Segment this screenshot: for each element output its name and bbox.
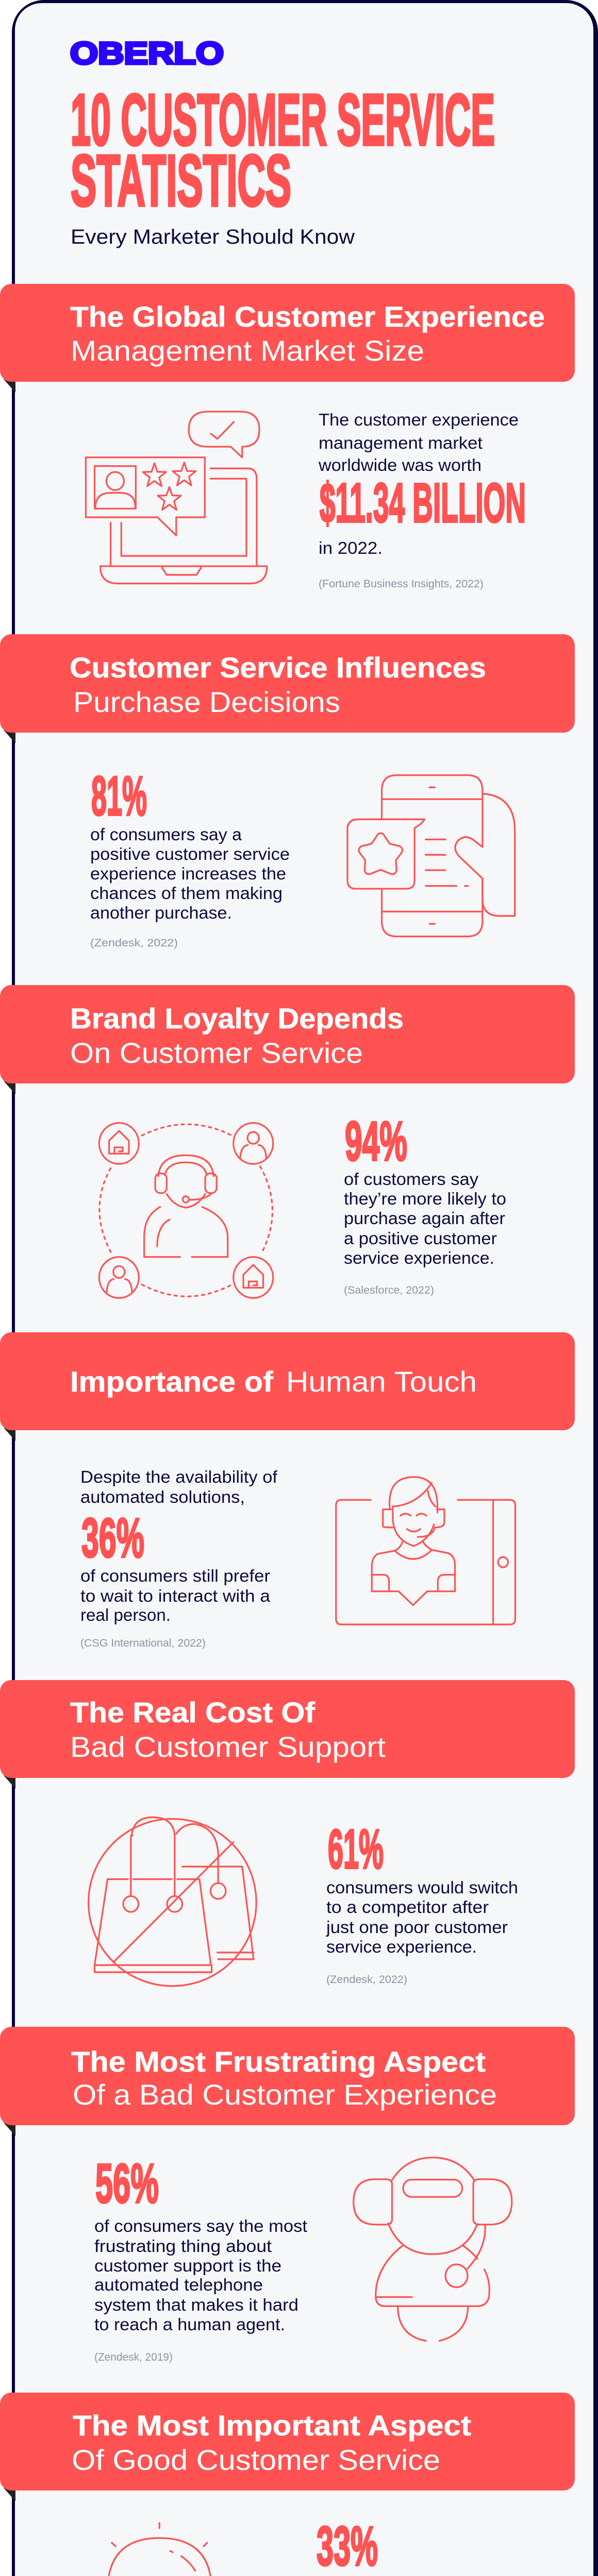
stat number: 33%: [317, 2515, 378, 2576]
source: (Fortune Business Insights, 2022): [319, 578, 484, 590]
stat text: service experience.: [344, 1248, 494, 1267]
stat number: 94%: [345, 1110, 407, 1172]
section header: Brand Loyalty Depends: [70, 1002, 404, 1035]
section header: [0, 2393, 575, 2501]
source: (CSG International, 2022): [80, 1637, 206, 1649]
stat text: real person.: [80, 1605, 171, 1624]
title: STATISTICS: [71, 140, 291, 221]
source: (Zendesk, 2019): [94, 2351, 173, 2363]
panel: most important aspect: [0, 2393, 575, 2576]
icon: robot with headset: [354, 2158, 512, 2341]
icon: laptop with review: [86, 412, 267, 584]
stat text: [80, 1467, 278, 1624]
stat text: purchase again after: [344, 1209, 505, 1228]
stat text: to a competitor after: [326, 1897, 489, 1917]
panel: brand loyalty: [0, 985, 575, 1298]
icon: agent on tablet: [336, 1477, 515, 1624]
section header: The Global Customer Experience: [70, 300, 545, 333]
section header: Of Good Customer Service: [72, 2444, 440, 2476]
source: (Salesforce, 2022): [344, 1284, 434, 1296]
icon: crossed out shopping bags: [89, 1817, 256, 1986]
title: [71, 79, 495, 221]
stat text: they’re more likely to: [344, 1189, 506, 1208]
panel: purchase decisions: [0, 634, 575, 949]
section header: [0, 1680, 575, 1789]
section header: Bad Customer Support: [70, 1731, 386, 1763]
stat text: [94, 2216, 307, 2334]
stat text: The customer experience: [319, 410, 519, 429]
panel: human touch: [0, 1332, 575, 1649]
source: (Zendesk, 2022): [90, 937, 178, 949]
stat text: of consumers say the most: [94, 2216, 307, 2235]
stat text: service experience.: [326, 1937, 477, 1956]
stat text: [90, 825, 290, 922]
panel: market size: [0, 284, 575, 590]
stat text: consumers would switch: [326, 1878, 518, 1897]
panel: cost of bad support: 61%: [328, 1818, 384, 1880]
section header: [0, 284, 575, 393]
section header: Purchase Decisions: [73, 686, 340, 718]
stat text: of consumers say a: [90, 825, 242, 844]
section header: The Real Cost Of: [70, 1696, 315, 1728]
stat text: of customers say: [344, 1170, 479, 1189]
section header: Of a Bad Customer Experience: [73, 2078, 497, 2111]
section header: [0, 985, 575, 1094]
stat text: positive customer service: [90, 844, 290, 863]
icon: light bulb: [92, 2523, 227, 2576]
section header: On Customer Service: [70, 1037, 363, 1069]
stat text: worldwide was worth: [318, 455, 481, 474]
section header: Management Market Size: [71, 334, 424, 367]
stat text: 36%: [81, 1506, 144, 1569]
panel: cost of bad support: [0, 1680, 575, 1986]
panel: most frustrating aspect: [0, 2027, 575, 2363]
section header: Customer Service Influences: [70, 651, 486, 684]
stat text: customer support is the: [94, 2256, 281, 2275]
stat text: Despite the availability of: [80, 1467, 278, 1486]
section header: Importance of: [70, 1365, 273, 1398]
logo: OBERLO: [70, 36, 224, 71]
stat text: [344, 1170, 506, 1267]
stat text: automated solutions,: [80, 1487, 245, 1506]
stat text: experience increases the: [90, 864, 286, 883]
stat text: to reach a human agent.: [94, 2315, 285, 2334]
stat text: to wait to interact with a: [80, 1586, 271, 1605]
section header: The Most Important Aspect: [73, 2409, 471, 2442]
section header: [0, 2027, 575, 2136]
stat text: [326, 1878, 518, 1956]
subtitle: Every Marketer Should Know: [71, 226, 355, 248]
panel: purchase decisions: 81%: [91, 765, 147, 827]
section header: Human Touch: [286, 1365, 477, 1398]
icon: phone with star review: [347, 775, 515, 937]
stat text: system that makes it hard: [94, 2295, 298, 2314]
section header: [0, 1332, 575, 1441]
stat text: management market: [319, 433, 483, 452]
section header: The Most Frustrating Aspect: [71, 2045, 486, 2078]
icon: support agent with customers: [99, 1123, 273, 1298]
stat text: another purchase.: [90, 903, 232, 922]
stat text: a positive customer: [344, 1229, 497, 1248]
stat text: automated telephone: [94, 2275, 263, 2294]
stat text: [318, 410, 526, 557]
stat text: chances of them making: [90, 884, 283, 903]
stat text: just one poor customer: [326, 1918, 508, 1937]
source: (Zendesk, 2022): [326, 1974, 407, 1986]
section header: [0, 634, 575, 743]
stat text: in 2022.: [319, 538, 383, 557]
stat number: 56%: [95, 2152, 159, 2214]
stat text: frustrating thing about: [94, 2236, 272, 2256]
stat text: of consumers still prefer: [80, 1566, 270, 1585]
